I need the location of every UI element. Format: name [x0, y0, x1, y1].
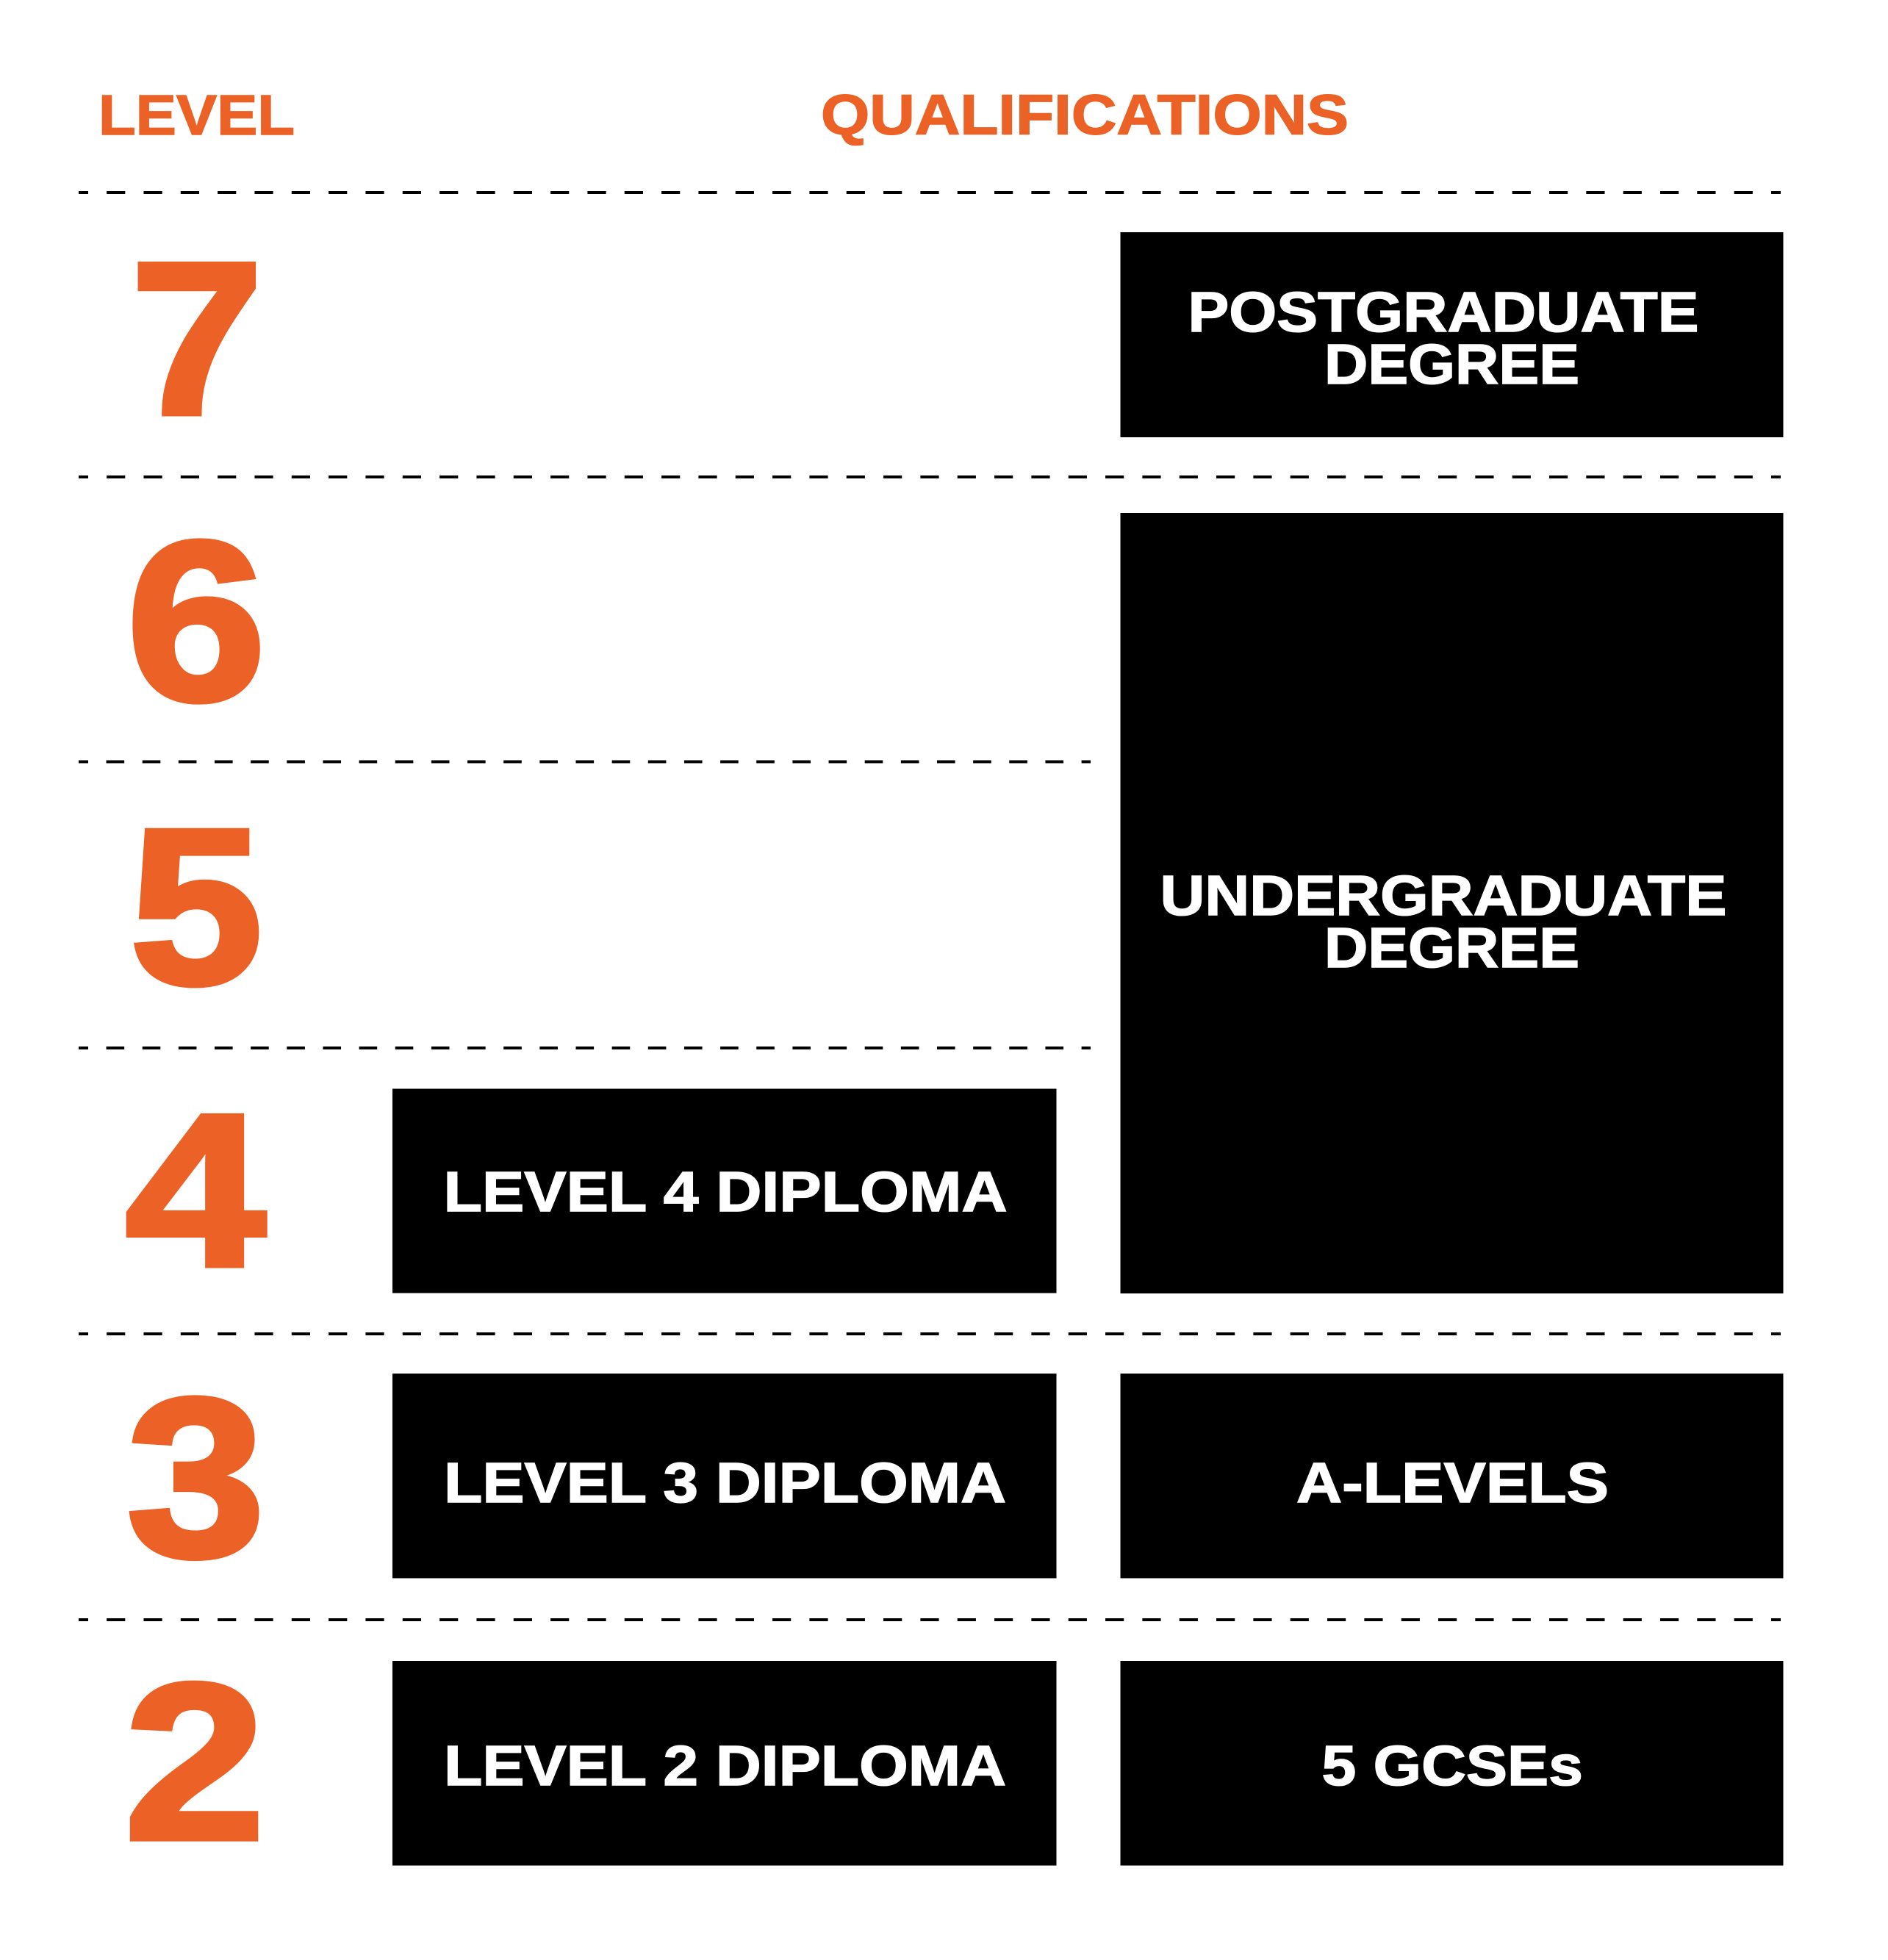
level number 5: 5 — [129, 783, 263, 1030]
box: level 2 diploma — [392, 1661, 1057, 1865]
level number 2: 2 — [124, 1637, 265, 1887]
box: level 3 diploma — [392, 1374, 1057, 1579]
box: level 4 diploma — [392, 1089, 1057, 1293]
box: undergraduate degree — [1120, 513, 1783, 1293]
box: postgraduate degree: DEGREE — [1324, 333, 1579, 396]
box: level 3 diploma: LEVEL 3 DIPLOMA — [444, 1451, 1006, 1515]
box: undergraduate degree: UNDERGRADUATE — [1160, 864, 1727, 927]
level number 3: 3 — [126, 1351, 265, 1604]
box: a-levels: A-LEVELS — [1296, 1451, 1609, 1515]
heading: level: LEVEL — [98, 84, 295, 147]
level number 7: 7 — [130, 217, 264, 460]
box: level 2 diploma: LEVEL 2 DIPLOMA — [444, 1734, 1006, 1798]
box: postgraduate degree: POSTGRADUATE — [1188, 281, 1699, 344]
box: postgraduate degree — [1120, 232, 1783, 437]
box: a-levels — [1120, 1374, 1783, 1579]
box: undergraduate degree: DEGREE — [1324, 916, 1579, 980]
box: 5 gcses: 5 GCSEs — [1321, 1734, 1583, 1798]
level number 6: 6 — [126, 494, 266, 748]
box: level 4 diploma: LEVEL 4 DIPLOMA — [444, 1160, 1007, 1224]
level number 4: 4 — [126, 1069, 268, 1312]
box: 5 gcses — [1120, 1661, 1783, 1865]
heading: qualifications: QUALIFICATIONS — [821, 84, 1349, 147]
